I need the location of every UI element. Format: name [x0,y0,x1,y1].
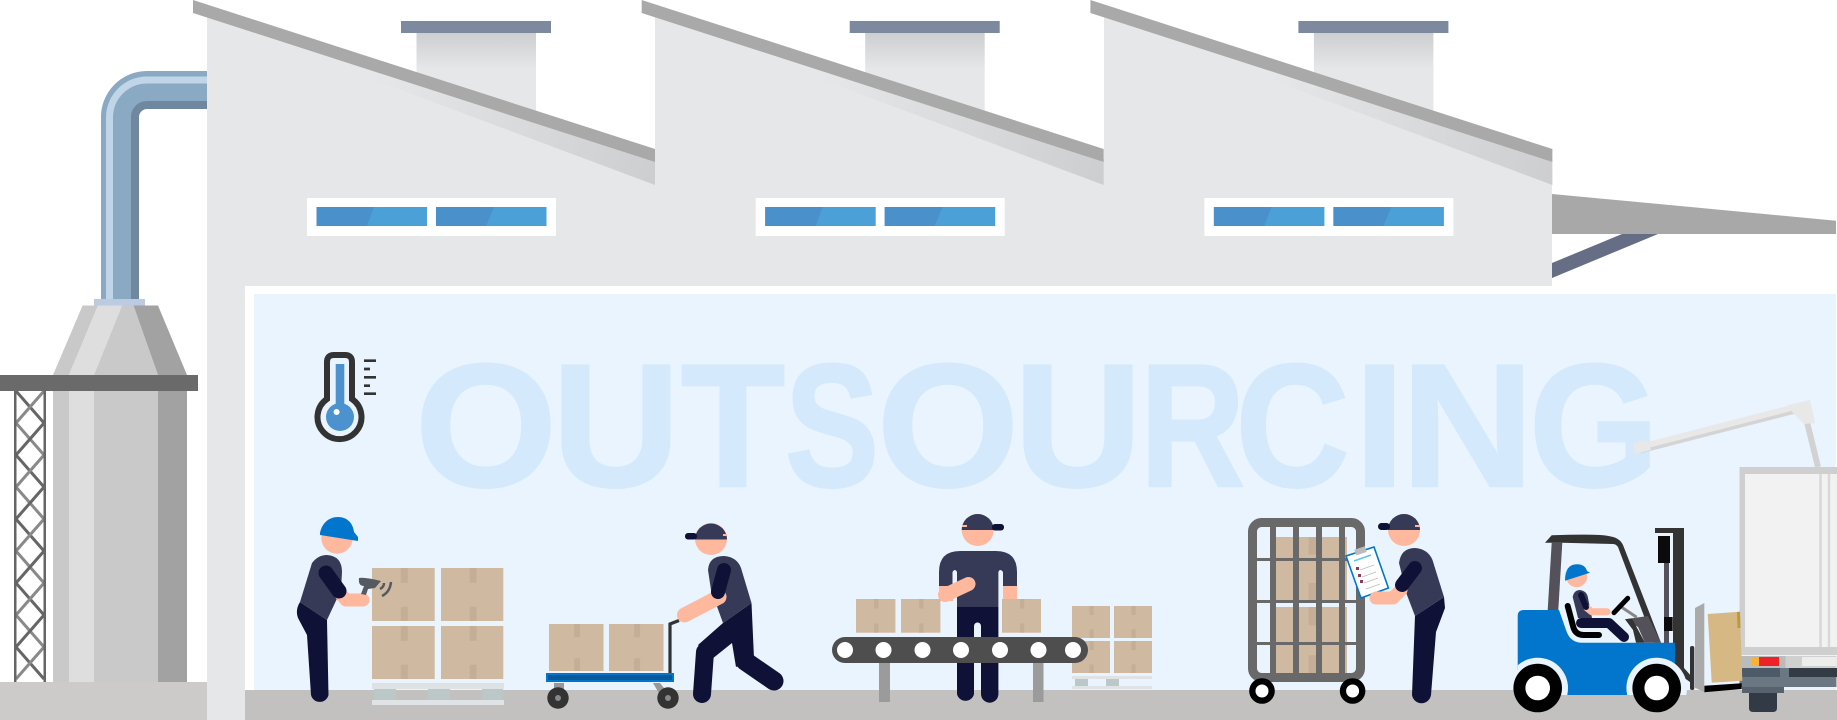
fork carriage and cargo [1690,603,1742,692]
watermark title: G [1529,329,1659,524]
watermark title: O [415,329,557,524]
platform beam [0,375,198,391]
worker pushing cart [684,523,774,694]
roll cage with boxes [1249,520,1365,704]
roof section 1 with chimney and window [193,0,655,236]
watermark title: R [1140,329,1245,524]
warehouse interior [254,294,1836,690]
mast [1655,528,1692,682]
silo hopper and column [53,306,187,682]
awning on right side [1552,194,1836,278]
watermark title: N [1401,329,1534,524]
forklift body [1518,610,1675,695]
rear wheel [1626,658,1687,718]
interior floor [245,690,1837,720]
clipboard [1346,546,1388,598]
front wheel [1513,658,1568,712]
duct pipe [94,80,207,306]
watermark title: O [877,329,1019,524]
icon: thermometer [318,355,376,439]
roof section 2 with chimney and window [642,0,1104,236]
worker with clipboard [1346,514,1445,703]
boxes on pallet [372,568,504,705]
truck lift arm [1633,400,1818,467]
driver [1565,564,1637,637]
stacked boxes behind conveyor [1072,606,1152,689]
watermark title: U [552,329,680,524]
cab frame [1545,535,1661,643]
forklift [1507,528,1742,718]
watermark title: C [1236,329,1350,524]
roof section 3 with chimney and window [1090,0,1552,236]
factory wall [207,14,1552,720]
outer ground [0,682,207,720]
watermark title: T [681,329,785,524]
watermark title: U [1014,329,1142,524]
flat cart with boxes [546,620,679,709]
steel truss support [14,391,46,682]
watermark title: I [1354,329,1405,524]
truck rear [1740,467,1837,712]
worker at conveyor [939,514,1017,703]
watermark title: S [785,329,879,524]
conveyor belt with boxes [832,599,1088,702]
worker with helmet scanning boxes [297,517,391,702]
